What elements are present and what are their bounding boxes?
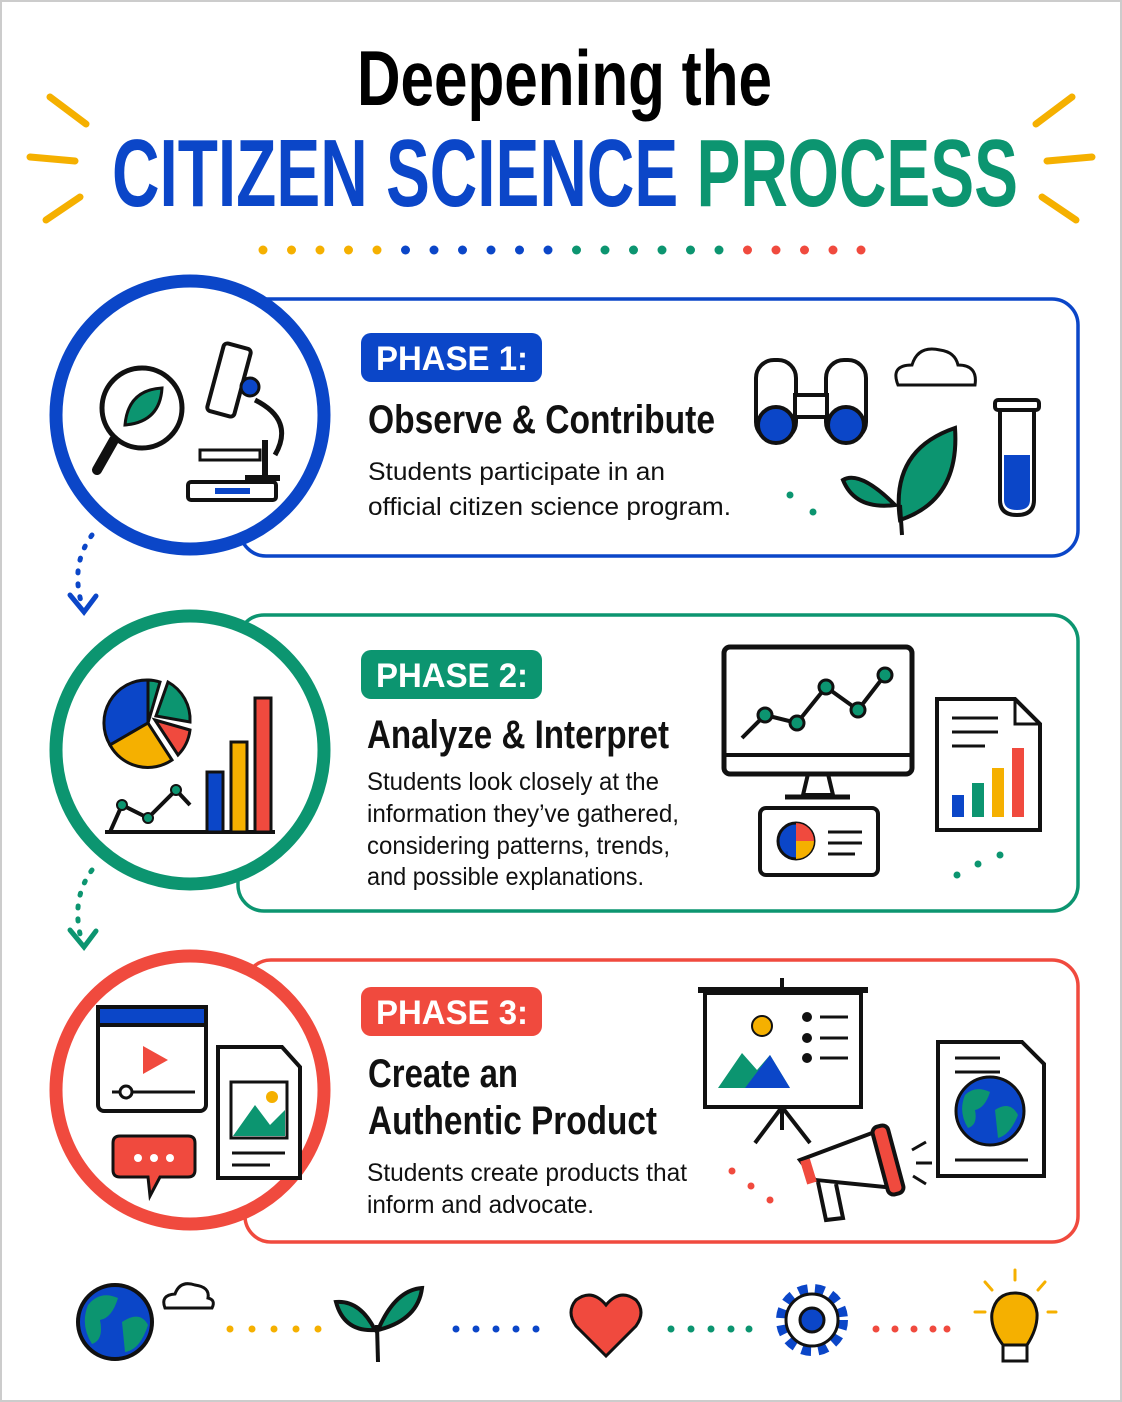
icon: globe [78,1285,152,1359]
badge: phase 3 [361,987,542,1036]
icons: monitor with graph, card, report [724,647,1040,878]
body text: Students create products that [367,1159,687,1187]
panel: phase 1 [56,281,1078,556]
icon: light bulb [975,1270,1056,1361]
badge: phase 3: PHASE 3: [376,994,528,1032]
icon circle: magnifier and microscope [56,281,324,549]
arrow: phase 1 to 2 [70,535,96,612]
icons: presentation, megaphone, globe document [698,978,1044,1220]
dotted divider [258,246,866,254]
decorative rays [30,97,1092,220]
badge: phase 2: PHASE 2: [376,657,528,695]
heading: create an authentic product: Authentic Product [368,1099,657,1143]
arrow: phase 2 to 3 [70,870,96,947]
icon circle: video, document, chat [56,956,324,1224]
icon: heart [571,1295,641,1356]
title [112,34,1018,227]
body text: information they’ve gathered, [367,800,679,828]
icon circle: charts [56,616,324,884]
icon: sprout [336,1288,422,1362]
badge: phase 1 [361,333,542,382]
panel: phase 3 [56,956,1078,1242]
badge: phase 2 [361,650,542,699]
badge: phase 1: PHASE 1: [376,340,528,378]
heading: observe & contribute: Observe & Contribute [368,398,715,442]
heading: create an authentic product: Create an [368,1052,518,1096]
icon: cloud [164,1284,213,1308]
icons: binoculars, cloud, leaf, test tube [756,349,1039,535]
bottom icon row [78,1270,1056,1362]
body text: and possible explanations. [367,863,644,891]
body text: official citizen science program. [368,493,731,521]
body text: Students participate in an [368,458,665,486]
body text: inform and advocate. [367,1191,594,1219]
body text: Students look closely at the [367,768,659,796]
icon: gear [782,1290,842,1350]
heading: analyze & interpret: Analyze & Interpret [367,713,669,757]
panel: phase 2 [56,615,1078,911]
body text: considering patterns, trends, [367,832,670,860]
title: Deepening the [357,34,772,122]
